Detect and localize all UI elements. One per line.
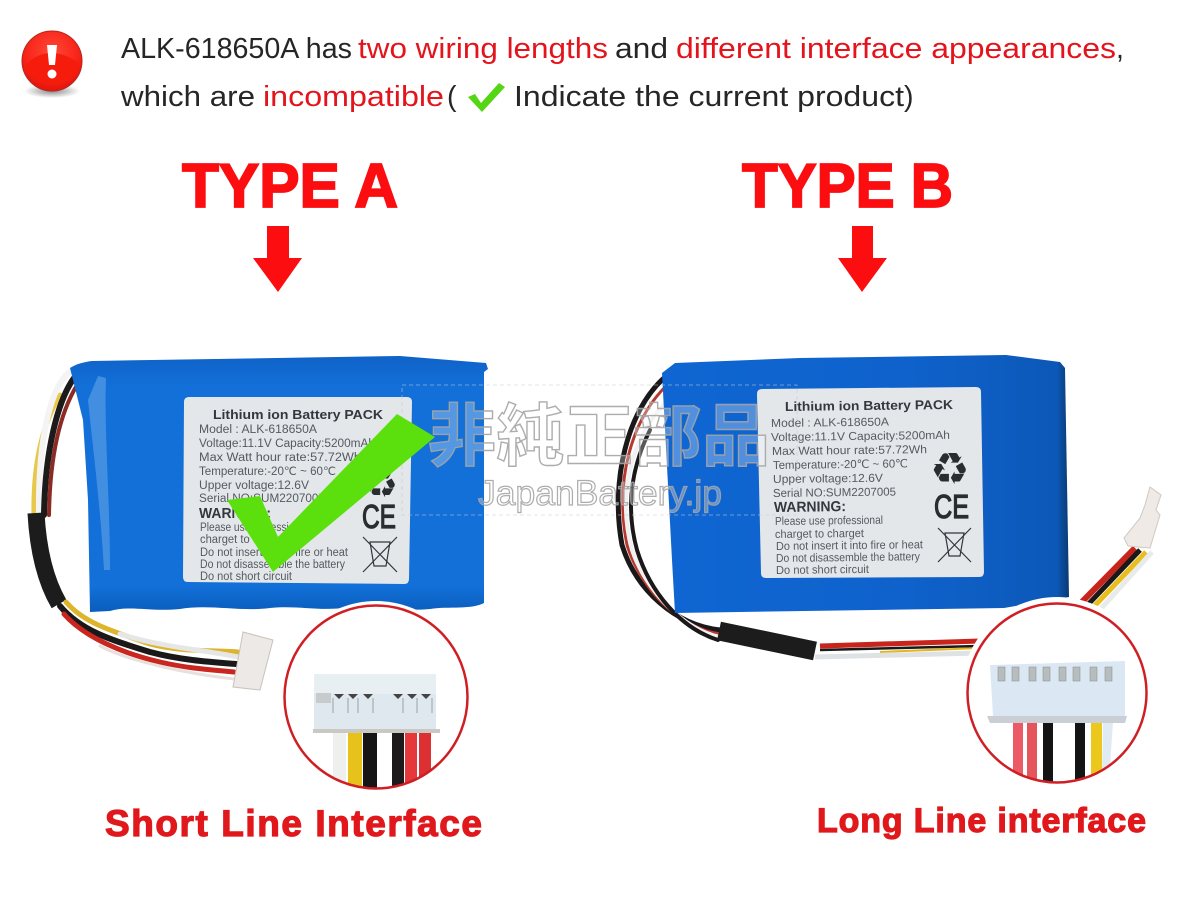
wires: battery A bbox=[34, 370, 238, 679]
wires: battery B bbox=[618, 378, 1152, 657]
heading: type A: TYPE A bbox=[182, 152, 398, 221]
label: battery A: WARNING: bbox=[199, 506, 271, 522]
caption: short line: Short Line Interface bbox=[105, 803, 482, 844]
label: battery A: Do not insert it into fire or heat bbox=[200, 547, 349, 559]
label: battery A: charget to charget bbox=[200, 534, 291, 546]
label: battery B: Voltage:11.1V Capacity:5200mAh bbox=[771, 430, 950, 444]
watermark: JapanBattery.jp bbox=[478, 474, 722, 513]
label: battery B: Please use professional bbox=[775, 515, 883, 528]
watermark: 非純正部品 bbox=[428, 399, 770, 475]
heading text: which are bbox=[120, 81, 255, 113]
label: battery B: Temperature:-20℃ ~ 60℃ bbox=[773, 458, 908, 472]
battery A bbox=[34, 356, 488, 690]
heading text: and bbox=[615, 33, 668, 65]
heading text: ( bbox=[447, 81, 457, 113]
arrow: type A bbox=[253, 226, 302, 292]
label: battery B: Do not short circuit bbox=[776, 564, 870, 577]
label: battery A: Please use professional bbox=[200, 522, 308, 534]
large green check bbox=[227, 414, 435, 572]
label: battery B: CE bbox=[934, 488, 969, 525]
label: battery B: Max Watt hour rate:57.72Wh bbox=[772, 444, 927, 458]
label: battery A: Lithium ion Battery PACK bbox=[213, 407, 384, 422]
heading text: incompatible bbox=[263, 81, 444, 113]
label: battery A: Serial NO:SUM2207005 bbox=[199, 493, 325, 505]
label: battery A bbox=[183, 397, 412, 584]
connector: battery B bbox=[1124, 487, 1161, 548]
highlight: battery A bbox=[88, 376, 110, 570]
battery B bbox=[618, 355, 1161, 657]
heading text: ALK-618650A has bbox=[121, 33, 352, 65]
caption: long line: Long Line interface bbox=[817, 802, 1146, 840]
label: battery A: Upper voltage:12.6V bbox=[199, 480, 309, 492]
label: battery A: Do not disassemble the battery bbox=[200, 559, 345, 571]
label: battery B: ♻ bbox=[930, 444, 969, 495]
heading text: two wiring lengths bbox=[358, 33, 608, 65]
watermark bbox=[402, 385, 797, 515]
label: battery B bbox=[757, 387, 984, 578]
battery body: A bbox=[70, 356, 488, 612]
label: battery A: Voltage:11.1V Capacity:5200mAh bbox=[199, 438, 375, 450]
label: battery A: Temperature:-20℃ ~ 60℃ bbox=[199, 466, 336, 478]
label: battery B: Serial NO:SUM2207005 bbox=[773, 486, 896, 500]
alert icon bbox=[22, 31, 82, 98]
label: battery A: Max Watt hour rate:57.72Wh bbox=[199, 452, 361, 464]
heading text: ) bbox=[904, 81, 914, 113]
label: battery B: WARNING: bbox=[774, 499, 846, 516]
heading text bbox=[120, 33, 1124, 113]
callout: long line connector bbox=[961, 597, 1153, 789]
arrow: type B bbox=[838, 226, 887, 292]
callout: short line connector bbox=[280, 601, 472, 793]
label: battery B: Upper voltage:12.6V bbox=[773, 473, 883, 486]
icon: small green check bbox=[468, 83, 505, 112]
label: battery A: Do not short circuit bbox=[200, 571, 293, 583]
connector: battery A bbox=[233, 632, 273, 690]
heading text: , bbox=[1116, 33, 1124, 65]
heading text: Indicate the current product bbox=[514, 81, 904, 113]
label: battery B: charget to charget bbox=[775, 528, 865, 541]
label: battery B: Do not disassemble the battery bbox=[776, 551, 920, 565]
label: battery B: Do not insert it into fire or heat bbox=[776, 539, 924, 553]
heading: type B: TYPE B bbox=[742, 152, 953, 221]
label: battery A: Model : ALK-618650A bbox=[199, 424, 317, 436]
label: battery B: Model : ALK-618650A bbox=[771, 417, 889, 430]
label: battery A: ♻ bbox=[364, 462, 398, 506]
label: battery B: Lithium ion Battery PACK bbox=[785, 397, 954, 414]
battery body: B bbox=[662, 355, 1069, 613]
heading text: different interface appearances bbox=[676, 33, 1116, 65]
label: battery A: CE bbox=[362, 498, 396, 535]
